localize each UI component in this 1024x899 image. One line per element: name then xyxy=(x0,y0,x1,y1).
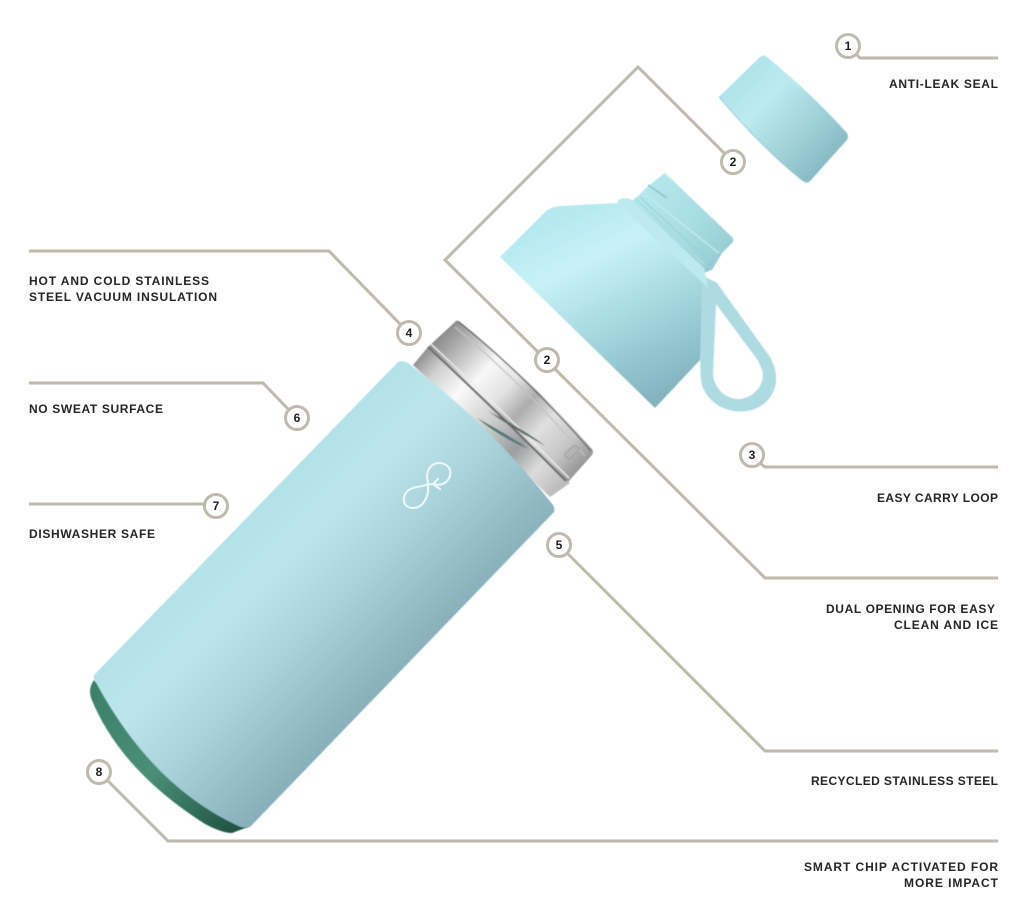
label: recycled stainless steel: RECYCLED STAINLESS STEEL xyxy=(811,774,998,788)
illustration: bottle top with loop xyxy=(500,173,776,411)
upper band xyxy=(428,320,593,482)
label: smart chip xyxy=(804,860,999,890)
top rim xyxy=(459,322,591,451)
badge 1: 1 xyxy=(845,39,852,53)
badge 2: 2 xyxy=(544,353,551,367)
label: dual opening: DUAL OPENING FOR EASY xyxy=(826,602,995,616)
label: dual opening xyxy=(826,602,998,632)
label: easy carry loop: EASY CARRY LOOP xyxy=(877,491,998,505)
badge 3 xyxy=(740,444,764,466)
badge 6 xyxy=(286,406,308,430)
badge 8 xyxy=(88,760,110,784)
label: dishwasher safe: DISHWASHER SAFE xyxy=(29,527,155,541)
callout line 5 xyxy=(567,553,998,751)
collar band xyxy=(618,198,708,288)
threaded neck xyxy=(625,173,733,273)
slots xyxy=(488,411,546,446)
badge 2 top: 2 xyxy=(730,155,737,169)
rolled ring xyxy=(428,347,566,481)
icon: infinity logo xyxy=(404,463,450,508)
callout line 3 xyxy=(760,463,998,467)
callout line 2 upper xyxy=(445,67,725,352)
label: insulation: STEEL VACUUM INSULATION xyxy=(29,290,217,304)
callout line 7 xyxy=(29,502,204,506)
label: smart chip: SMART CHIP ACTIVATED FOR xyxy=(804,860,998,874)
badge 7 xyxy=(204,494,228,518)
badge 4 xyxy=(398,322,420,344)
callout line 8 xyxy=(107,780,998,841)
label: no sweat surface: NO SWEAT SURFACE xyxy=(29,402,163,416)
illustration: steel neck of main bottle xyxy=(413,320,593,497)
badge 4: 4 xyxy=(406,326,413,340)
label: anti-leak seal: ANTI-LEAK SEAL xyxy=(889,77,998,91)
callout line 4 xyxy=(29,251,401,325)
label: smart chip: MORE IMPACT xyxy=(904,876,999,890)
badge 5: 5 xyxy=(556,538,563,552)
illustration: main bottle body xyxy=(94,361,554,828)
neck threads xyxy=(635,185,720,272)
illustration: lid cap xyxy=(719,56,848,182)
badge 8: 8 xyxy=(96,765,103,779)
badge 6: 6 xyxy=(294,411,301,425)
callout line 6 xyxy=(29,383,289,410)
carry loop xyxy=(696,272,776,411)
lower band xyxy=(413,347,570,497)
illustration: green base xyxy=(90,680,248,833)
embossed mark xyxy=(564,444,580,460)
badge 7: 7 xyxy=(213,499,220,513)
badge 3: 3 xyxy=(749,448,756,462)
label: insulation: HOT AND COLD STAINLESS xyxy=(29,274,209,288)
callout line 2 lower xyxy=(554,368,998,578)
badge 2 xyxy=(536,348,558,372)
callout line 1 xyxy=(855,53,998,58)
badge 2 top xyxy=(722,150,744,174)
badge 1 xyxy=(836,34,860,58)
badge 5 xyxy=(548,534,570,556)
shoulder xyxy=(500,203,702,408)
label: dual opening: CLEAN AND ICE xyxy=(894,618,998,632)
label: insulation xyxy=(29,274,217,304)
